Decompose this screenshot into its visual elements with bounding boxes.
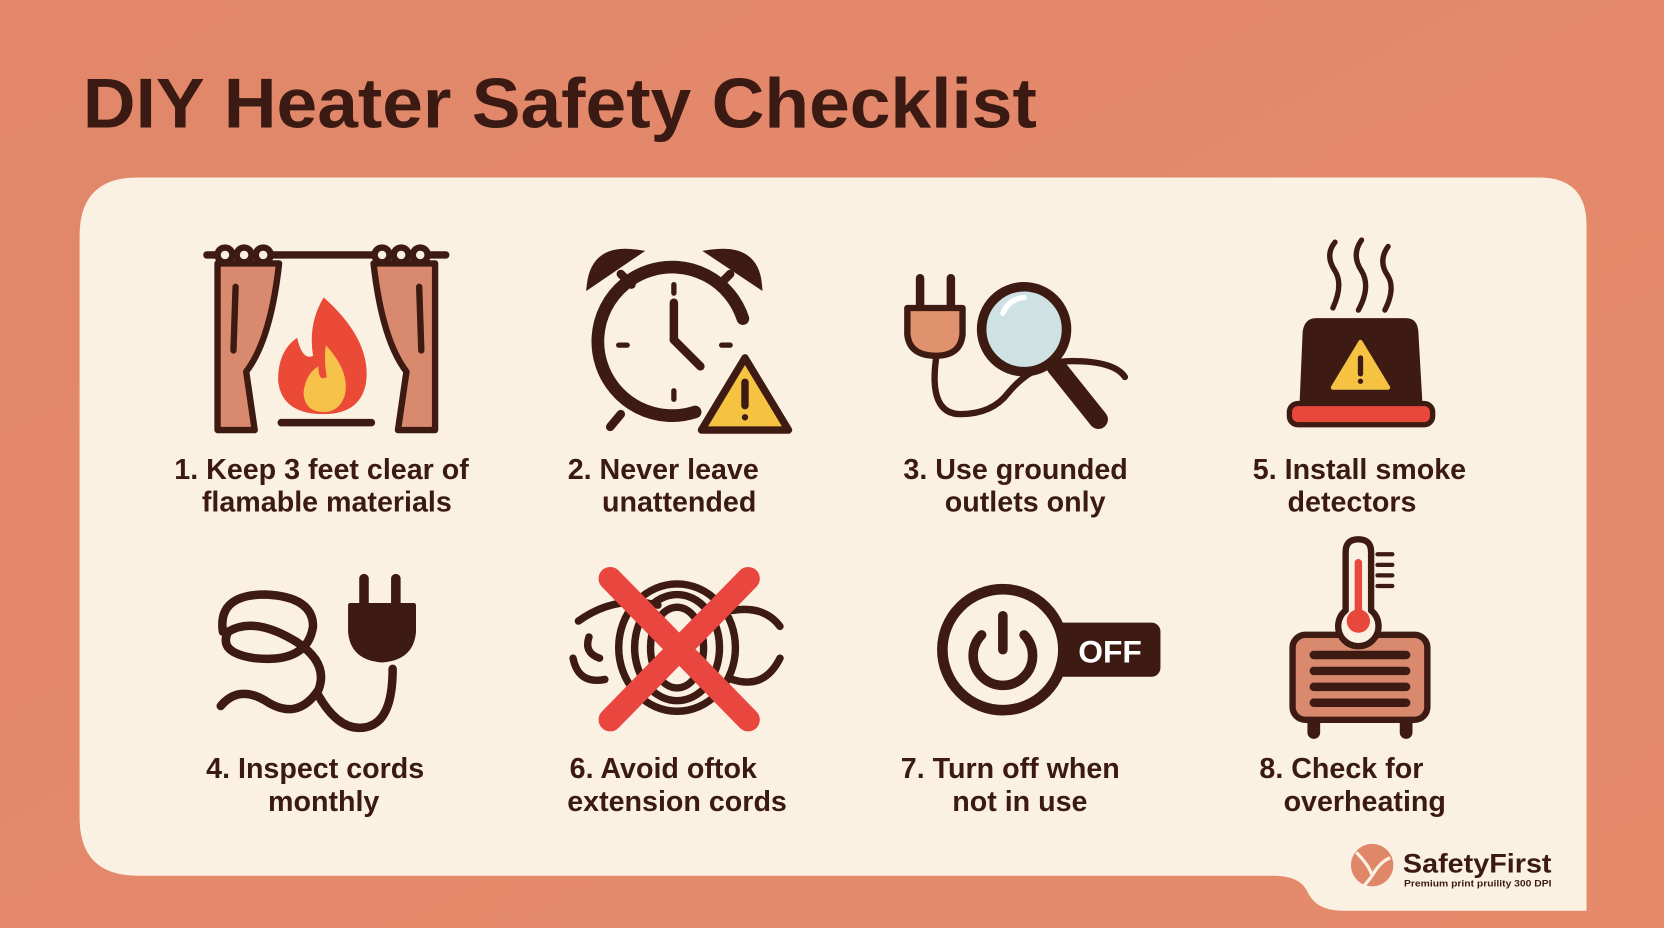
label 1: 1. Keep 3 feet clear of — [174, 454, 469, 486]
label 1: flamable materials — [202, 487, 452, 519]
panel: checklist card — [80, 177, 1587, 911]
label 5: detectors — [1288, 487, 1416, 519]
label 8: 8. Check for — [1259, 753, 1423, 785]
logo: SafetyFirst: SafetyFirst — [1403, 849, 1552, 879]
label 5: 5. Install smoke — [1253, 454, 1466, 486]
icon: cord and plug — [221, 579, 414, 728]
label 6: 6. Avoid oftok — [570, 753, 757, 785]
logo: SafetyFirst — [1351, 844, 1552, 889]
logo: SafetyFirst: Premium print pruility 300 DPI — [1404, 878, 1552, 889]
label 4: monthly — [268, 786, 379, 818]
icon: alarm clock with warning — [590, 252, 788, 430]
label 8: overheating — [1284, 786, 1446, 818]
label 6: extension cords — [567, 786, 787, 818]
label 3: 3. Use grounded — [903, 454, 1128, 486]
icon: heater with thermometer — [1293, 539, 1427, 732]
label 3: outlets only — [945, 487, 1106, 519]
label 2: unattended — [602, 487, 756, 519]
label 7: 7. Turn off when — [901, 753, 1120, 785]
icon: plug and magnifier — [907, 278, 1125, 419]
icon: curtains and fire — [207, 248, 446, 430]
icon: coiled extension cord crossed out — [573, 579, 780, 720]
label 7: not in use — [952, 786, 1087, 818]
label 4: 4. Inspect cords — [206, 753, 424, 785]
icon: power button OFF: OFF — [1078, 633, 1142, 669]
label 2: 2. Never leave — [568, 454, 759, 486]
icon: power button OFF — [942, 589, 1160, 710]
title: DIY Heater Safety Checklist — [83, 65, 1037, 143]
icon: smoke detector — [1289, 240, 1433, 425]
